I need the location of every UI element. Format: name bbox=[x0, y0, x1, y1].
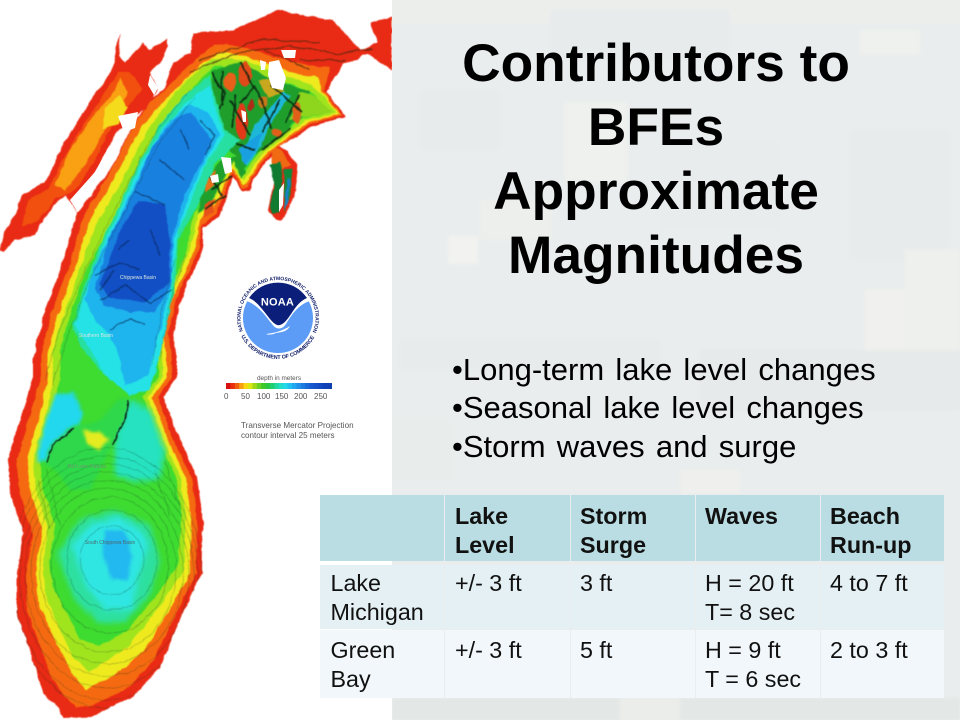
lime band bbox=[33, 58, 337, 672]
finger peninsula bbox=[270, 148, 292, 214]
magnitudes table: 5 ft bbox=[580, 637, 612, 663]
depth legend: 50 bbox=[241, 392, 250, 401]
south basin cyan bbox=[72, 517, 148, 610]
south basin sky core bbox=[103, 530, 132, 580]
green zone bbox=[40, 65, 330, 645]
bullet list: •Long-term lake level changes bbox=[452, 352, 876, 386]
magnitudes table: Bay bbox=[330, 666, 371, 692]
basin labels: South Chippewa Basin bbox=[85, 540, 136, 546]
depth legend bbox=[224, 375, 354, 440]
magnitudes table: H = 20 ft bbox=[705, 570, 794, 596]
depth legend: 100 bbox=[257, 392, 271, 401]
bullet list: •Storm waves and surge bbox=[452, 428, 796, 464]
magnitudes table: Green bbox=[330, 637, 395, 663]
depth legend: Transverse Mercator Projection bbox=[241, 421, 354, 430]
magnitudes table: Lake bbox=[330, 570, 381, 596]
magnitudes table bbox=[320, 495, 944, 698]
NOAA logo: NOAA bbox=[261, 296, 294, 308]
magnitudes table: Level bbox=[455, 532, 515, 558]
main lake: red shoreline band bbox=[8, 10, 392, 718]
NOAA logo: U.S. DEPARTMENT OF COMMERCE bbox=[242, 334, 314, 359]
bullet list bbox=[452, 352, 876, 464]
magnitudes table: Storm bbox=[580, 503, 647, 529]
white inlets and islands bbox=[70, 50, 296, 212]
basin labels: Chippewa Basin bbox=[120, 275, 156, 281]
magnitudes table: +/- 3 ft bbox=[455, 637, 522, 663]
contour lines bbox=[10, 90, 202, 708]
magnitudes table: T = 6 sec bbox=[705, 666, 801, 692]
camouflage background bbox=[392, 0, 960, 720]
magnitudes table: T= 8 sec bbox=[705, 599, 795, 625]
bullet list: •Seasonal lake level changes bbox=[452, 390, 864, 425]
teal zone north bbox=[72, 75, 240, 395]
magnitudes table: Run-up bbox=[830, 532, 912, 558]
right mid-lake teal area bbox=[115, 400, 165, 482]
magnitudes table: Waves bbox=[705, 503, 778, 529]
title bbox=[462, 34, 850, 284]
depth legend: contour interval 25 meters bbox=[241, 431, 335, 440]
magnitudes table: +/- 3 ft bbox=[455, 570, 522, 596]
south basin teal bbox=[57, 510, 160, 624]
title: Approximate bbox=[493, 162, 819, 220]
title: Contributors to bbox=[462, 34, 850, 92]
map: Lake Michigan bathymetry bbox=[0, 9, 392, 719]
mid-lake plateau ridge bbox=[45, 398, 128, 490]
left mid-lake cyan lobe bbox=[37, 393, 82, 462]
title: Magnitudes bbox=[508, 226, 804, 284]
magnitudes table: Beach bbox=[830, 503, 900, 529]
sky zone north bbox=[85, 105, 220, 385]
magnitudes table: Lake bbox=[455, 503, 508, 529]
depth legend: 0 bbox=[224, 392, 229, 401]
NOAA logo: NATIONAL OCEANIC AND ATMOSPHERIC ADMINISTRATION bbox=[237, 276, 319, 333]
western arm bbox=[0, 33, 168, 252]
cyan zone north bbox=[75, 85, 225, 395]
basin labels bbox=[68, 275, 156, 546]
basin rough texture bbox=[95, 120, 215, 330]
northeast island patchwork bbox=[190, 40, 372, 218]
depth legend: 150 bbox=[275, 392, 289, 401]
magnitudes table: 3 ft bbox=[580, 570, 612, 596]
blue basin bbox=[95, 112, 212, 312]
basin labels: Mid Lake Plateau bbox=[68, 464, 107, 470]
yellow band bbox=[27, 52, 340, 690]
dark blue Chippewa basin bbox=[100, 200, 170, 302]
title: BFEs bbox=[588, 98, 724, 156]
magnitudes table: 2 to 3 ft bbox=[830, 637, 908, 663]
magnitudes table: 4 to 7 ft bbox=[830, 570, 908, 596]
magnitudes table: Surge bbox=[580, 532, 646, 558]
magnitudes table: Michigan bbox=[330, 599, 424, 625]
depth legend: depth in meters bbox=[257, 375, 301, 382]
basin labels: Southern Basin bbox=[79, 333, 113, 339]
magnitudes table: H = 9 ft bbox=[705, 637, 781, 663]
depth legend: 200 bbox=[294, 392, 308, 401]
NOAA logo bbox=[237, 276, 319, 359]
orange band bbox=[17, 44, 343, 708]
depth legend: 250 bbox=[314, 392, 328, 401]
